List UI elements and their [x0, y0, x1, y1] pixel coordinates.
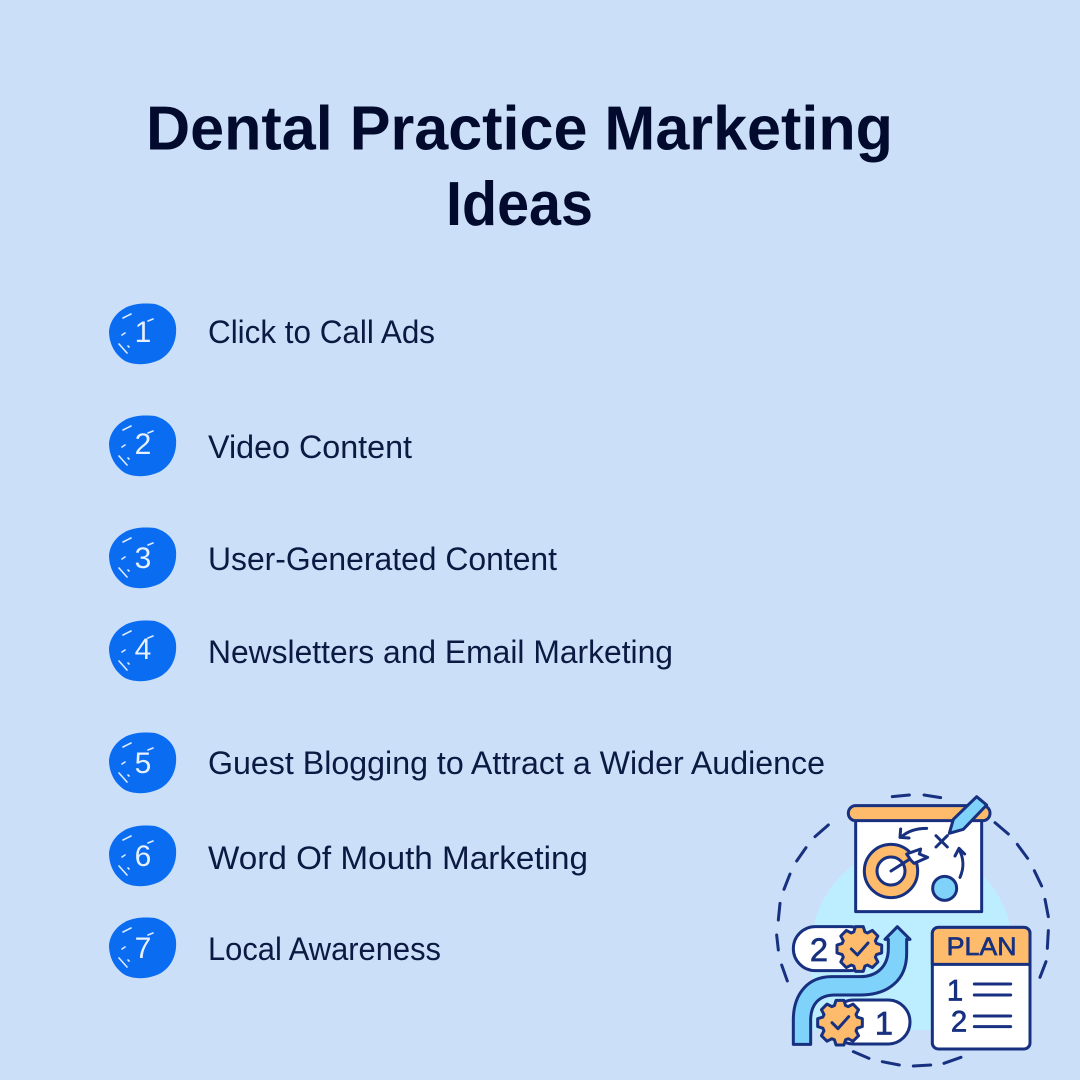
plan card: 2 [951, 1006, 967, 1039]
list item 1: 1 [135, 316, 151, 349]
light blue backdrop [812, 846, 1012, 1030]
list item 3: 3 [135, 542, 151, 575]
step 2 pill [793, 927, 872, 971]
list item 6: Word Of Mouth Marketing [208, 840, 588, 876]
list item 2: 2 [135, 428, 151, 461]
list item 6 [109, 825, 588, 886]
list item 3: User-Generated Content [208, 541, 557, 577]
list item 6: 6 [135, 840, 151, 873]
list item 7: Local Awareness [208, 931, 441, 967]
list item 3 [109, 527, 557, 588]
dashed ring [777, 795, 1048, 1066]
step 1 pill [832, 1000, 910, 1044]
plan card: PLAN [947, 933, 1017, 961]
title [146, 94, 893, 239]
list item 1: Click to Call Ads [208, 314, 435, 350]
list item 7 [109, 917, 441, 978]
plan card [932, 927, 1030, 1049]
step 2 pill: 2 [810, 931, 828, 968]
title: Ideas [446, 170, 593, 239]
step 1 gear [818, 1000, 862, 1045]
list item 4: Newsletters and Email Marketing [208, 634, 673, 670]
list item 5: 5 [135, 747, 151, 780]
list item 2: Video Content [208, 429, 412, 465]
list item 2 [109, 415, 412, 476]
icon: marketing plan illustration [777, 795, 1048, 1066]
step 1 pill: 1 [875, 1004, 893, 1041]
list item 5: Guest Blogging to Attract a Wider Audience [208, 745, 825, 781]
list item 1 [109, 303, 435, 364]
list item 4 [109, 620, 673, 681]
title: Dental Practice Marketing [146, 94, 893, 164]
growth arrow [793, 927, 910, 1044]
list item 5 [109, 732, 825, 793]
list item 7: 7 [135, 932, 151, 965]
strategy board [848, 797, 990, 912]
step 2 gear [837, 927, 882, 971]
list item 4: 4 [135, 633, 151, 666]
plan card: 1 [947, 975, 963, 1008]
